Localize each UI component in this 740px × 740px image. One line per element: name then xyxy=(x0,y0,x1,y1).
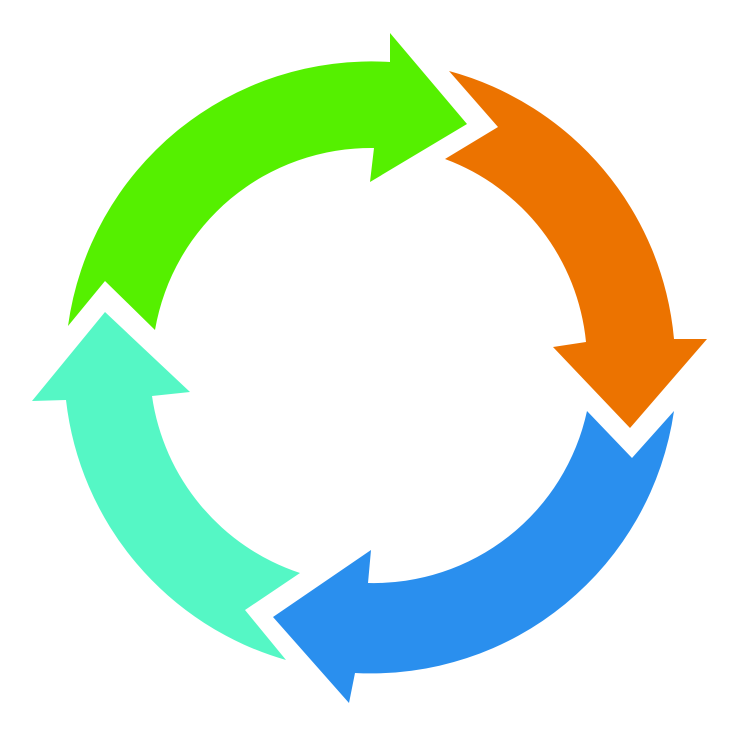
arrow: teal, bottom-left xyxy=(32,312,300,660)
arrow: blue, bottom-right xyxy=(273,411,674,703)
arrow: green, top-left xyxy=(68,33,467,330)
arrow: orange, top-right xyxy=(445,71,707,428)
